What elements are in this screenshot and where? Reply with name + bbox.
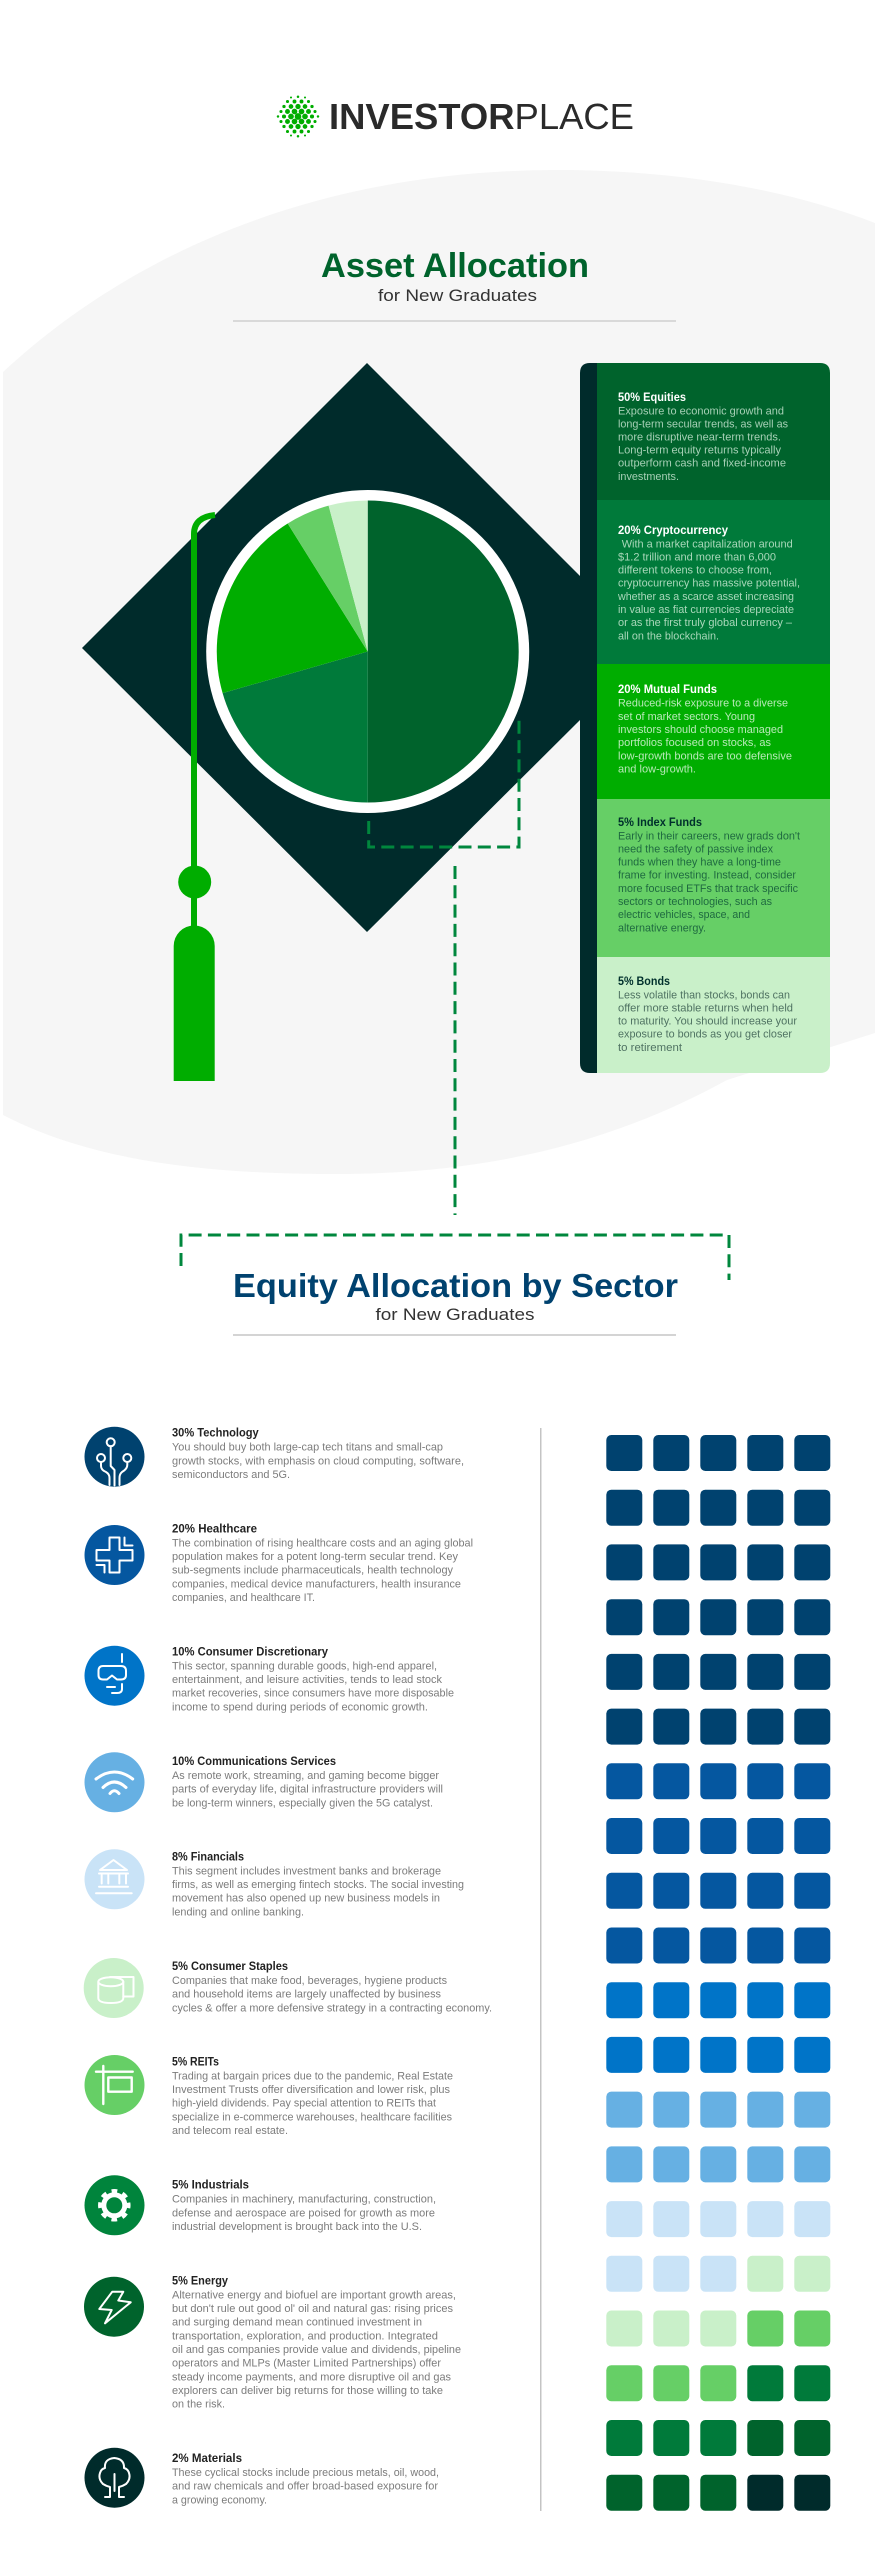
- text: Energy: Alternative energy and biofuel are important growth areas,: [172, 2289, 456, 2301]
- text: Healthcare: 20% Healthcare: [172, 1522, 258, 1535]
- text: REITs: [172, 2056, 453, 2137]
- heading: Equity Allocation by Sector: Equity Allocation by Sector: [233, 1267, 678, 1304]
- text: Financials: [172, 1851, 464, 1918]
- pie chart: asset allocation: [206, 490, 529, 813]
- text: Industrials: industrial development is brought back into the U.S.: [172, 2221, 422, 2233]
- panel section: 50% Equities: outperform cash and fixed-income: [618, 458, 786, 470]
- arrow: dashed bracket under pie: [369, 716, 519, 847]
- text: Consumer Staples: Companies that make food, beverages, hygiene products: [172, 1975, 447, 1987]
- text: Financials: firms, as well as emerging fintech stocks. The social investing: [172, 1879, 464, 1891]
- icon: snorkel mask: [84, 1646, 144, 1706]
- text: Healthcare: population makes for a potent long-term secular trend. Key: [172, 1551, 458, 1563]
- icon: circuit: [84, 1427, 144, 1487]
- waffle: Communications Services 10%: [606, 2092, 830, 2182]
- chart: waffle of sector allocation: [606, 1435, 830, 2511]
- text: Consumer Discretionary: entertainment, and leisure activities, tends to lead stock: [172, 1674, 442, 1686]
- panel section: 20% Cryptocurrency: cryptocurrency has massive potential,: [618, 578, 800, 590]
- waffle: REITs 5%: [606, 2310, 830, 2401]
- logo: InvestorPlace: [277, 96, 634, 137]
- text: Consumer Staples: 5% Consumer Staples: [172, 1960, 288, 1973]
- panel section: 50% Equities: investments.: [618, 471, 679, 483]
- panel section: 20% Mutual Funds: low-growth bonds are too defensive: [618, 750, 792, 762]
- icon: dotted globe: [277, 96, 319, 137]
- icon: property sign: [84, 2055, 144, 2115]
- panel section: 5% Bonds: exposure to bonds as you get closer: [618, 1029, 792, 1041]
- panel section: 5% Bonds: offer more stable returns when held: [618, 1002, 793, 1014]
- panel section: 20% Mutual Funds: portfolios focused on stocks, as: [618, 737, 771, 749]
- panel section: 5% Index Funds: [597, 799, 830, 957]
- text: REITs: Trading at bargain prices due to the pandemic, Real Estate: [172, 2070, 453, 2082]
- heading: Equity Allocation by Sector: for New Graduates: [376, 1305, 534, 1324]
- panel section: 20% Cryptocurrency: in value as fiat currencies depreciate: [618, 604, 794, 616]
- sector: REITs: [84, 2055, 453, 2137]
- text: Industrials: defense and aerospace are poised for growth as more: [172, 2207, 435, 2219]
- background: gray curved band: [3, 170, 875, 1174]
- text: Consumer Staples: [172, 1960, 492, 2014]
- text: Financials: This segment includes investment banks and brokerage: [172, 1865, 441, 1877]
- panel section: 5% Index Funds: 5% Index Funds: [618, 816, 702, 829]
- sector: Healthcare: [84, 1522, 473, 1604]
- waffle: Materials 2%: [747, 2475, 830, 2511]
- panel section: 5% Bonds: 5% Bonds: [618, 975, 670, 988]
- sector: Consumer Staples: [84, 1958, 492, 2018]
- text: Communications Services: As remote work, streaming, and gaming become bigger: [172, 1770, 439, 1782]
- panel section: 50% Equities: more disruptive near-term trends.: [618, 432, 781, 444]
- text: Consumer Discretionary: [172, 1646, 454, 1713]
- panel section: 5% Bonds: [597, 957, 830, 1073]
- text: Technology: 30% Technology: [172, 1427, 259, 1440]
- text: Financials: 8% Financials: [172, 1851, 244, 1864]
- text: Consumer Discretionary: income to spend during periods of economic growth.: [172, 1701, 428, 1713]
- waffle: Healthcare 20%: [606, 1763, 830, 1964]
- text: Materials: a growing economy.: [172, 2494, 267, 2506]
- text: Materials: These cyclical stocks include precious metals, oil, wood,: [172, 2467, 439, 2479]
- text: Communications Services: 10% Communications Services: [172, 1755, 336, 1768]
- tassel: [174, 515, 215, 1081]
- panel section: 5% Bonds: to retirement: [618, 1042, 683, 1054]
- text: Energy: transportation, exploration, and production. Integrated: [172, 2330, 438, 2342]
- text: Materials: [172, 2452, 439, 2506]
- text: Consumer Discretionary: 10% Consumer Discretionary: [172, 1646, 329, 1659]
- text: Healthcare: companies, and healthcare IT.: [172, 1592, 315, 1604]
- text: Consumer Staples: and household items are largely unaffected by business: [172, 1989, 441, 2001]
- text: Energy: steady income payments, and more disruptive oil and gas: [172, 2371, 451, 2383]
- text: Consumer Staples: cycles & offer a more defensive strategy in a contracting economy.: [172, 2002, 492, 2014]
- panel section: 5% Index Funds: electric vehicles, space, and: [618, 909, 750, 921]
- sector: Consumer Discretionary: [84, 1646, 454, 1713]
- panel section: 5% Index Funds: Early in their careers, new grads don't: [618, 830, 801, 842]
- text: Energy: operators and MLPs (Master Limited Partnerships) offer: [172, 2358, 441, 2370]
- text: Healthcare: sub-segments include pharmaceuticals, health technology: [172, 1565, 453, 1577]
- text: REITs: Investment Trusts offer diversification and lower risk, plus: [172, 2084, 450, 2096]
- panel section: 50% Equities: [597, 363, 830, 500]
- sector: Energy: [84, 2274, 461, 2411]
- icon: bank: [84, 1849, 144, 1909]
- text: Energy: but don't rule out good ol' oil and natural gas: rising prices: [172, 2303, 453, 2315]
- panel section: 5% Bonds: to maturity. You should increase your: [618, 1016, 797, 1028]
- text: Consumer Discretionary: market recoveries, since consumers have more disposable: [172, 1688, 454, 1700]
- text: Industrials: [172, 2179, 436, 2233]
- text: Industrials: 5% Industrials: [172, 2179, 249, 2192]
- text: Technology: You should buy both large-cap tech titans and small-cap: [172, 1442, 443, 1454]
- heading: Equity Allocation by Sector: [233, 1267, 678, 1336]
- sector: Materials: [84, 2448, 439, 2508]
- text: Materials: and raw chemicals and offer broad-based exposure for: [172, 2481, 438, 2493]
- text: REITs: 5% REITs: [172, 2056, 219, 2069]
- panel section: 20% Cryptocurrency: whether as a scarce asset increasing: [617, 591, 794, 603]
- icon: medical cross: [84, 1525, 144, 1585]
- panel section: 50% Equities: Exposure to economic growth and: [618, 405, 784, 417]
- panel section: 5% Bonds: Less volatile than stocks, bonds can: [618, 989, 790, 1001]
- icon: lightning bolt: [84, 2277, 144, 2337]
- icon: tree: [84, 2448, 144, 2508]
- text: Healthcare: The combination of rising healthcare costs and an aging global: [172, 1537, 473, 1549]
- panel section: 20% Mutual Funds: investors should choose managed: [618, 724, 783, 736]
- text: Materials: 2% Materials: [172, 2452, 242, 2465]
- text: REITs: specialize in e-commerce warehouses, healthcare facilities: [172, 2111, 452, 2123]
- text: REITs: high-yield dividends. Pay special attention to REITs that: [172, 2098, 437, 2110]
- text: Financials: lending and online banking.: [172, 1906, 304, 1918]
- text: Energy: explorers can deliver big returns for those willing to take: [172, 2385, 443, 2397]
- panel section: 5% Index Funds: need the safety of passive index: [618, 843, 773, 855]
- wordmark: INVESTORPLACE: [329, 96, 634, 137]
- panel section: 20% Cryptocurrency: 20% Cryptocurrency: [618, 524, 729, 537]
- sector: Communications Services: [84, 1752, 443, 1812]
- waffle: Consumer Discretionary 10%: [606, 1982, 830, 2073]
- text: Energy: oil and gas companies provide value and dividends, pipeline: [172, 2344, 461, 2356]
- text: Energy: and surging demand mean continued investment in: [172, 2317, 422, 2329]
- heading: Asset Allocation: Asset Allocation: [321, 247, 589, 285]
- panel section: 20% Cryptocurrency: or as the first truly global currency –: [618, 617, 793, 629]
- panel section: 20% Cryptocurrency: $1.2 trillion and more than 6,000: [618, 551, 776, 563]
- arrow: dashed bracket above equity title: [181, 1235, 729, 1280]
- text: Technology: semiconductors and 5G.: [172, 1469, 290, 1481]
- waffle: Energy 5%: [606, 2420, 830, 2511]
- heading: Asset Allocation: for New Graduates: [378, 286, 537, 305]
- text: Energy: 5% Energy: [172, 2274, 229, 2287]
- panel section: 50% Equities: long-term secular trends, as well as: [618, 418, 788, 430]
- icon: paper roll: [84, 1958, 144, 2018]
- panel section: 20% Cryptocurrency: different tokens to choose from,: [618, 565, 772, 577]
- panel section: 5% Index Funds: funds when they have a long-time: [618, 857, 781, 869]
- panel section: 50% Equities: 50% Equities: [618, 391, 686, 404]
- text: Healthcare: [172, 1522, 473, 1604]
- panel section: 20% Mutual Funds: and low-growth.: [618, 763, 696, 775]
- text: Financials: movement has also opened up new business models in: [172, 1893, 440, 1905]
- panel spine: [580, 363, 600, 1073]
- panel section: 20% Mutual Funds: [597, 664, 830, 799]
- waffle: Consumer Staples 5%: [606, 2256, 830, 2346]
- text: REITs: and telecom real estate.: [172, 2125, 288, 2137]
- text: Communications Services: be long-term winners, especially given the 5G catalyst.: [172, 1797, 433, 1809]
- text: Healthcare: companies, medical device manufacturers, health insurance: [172, 1578, 461, 1590]
- waffle: Technology 30%: [606, 1435, 830, 1745]
- panel section: 5% Index Funds: more focused ETFs that track specific: [618, 883, 798, 895]
- text: Technology: [172, 1427, 464, 1481]
- panel: asset classes: [580, 363, 830, 1073]
- heading: Asset Allocation: [233, 247, 676, 322]
- text: Communications Services: parts of everyday life, digital infrastructure providers will: [172, 1784, 443, 1796]
- text: Consumer Discretionary: This sector, spanning durable goods, high-end apparel,: [172, 1660, 437, 1672]
- sector: Technology: [84, 1427, 464, 1487]
- panel section: 20% Cryptocurrency: [597, 500, 830, 664]
- waffle: Industrials 5%: [606, 2365, 830, 2456]
- text: Energy: [172, 2274, 461, 2411]
- panel section: 50% Equities: Long-term equity returns typically: [618, 445, 781, 457]
- text: Industrials: Companies in machinery, manufacturing, construction,: [172, 2194, 436, 2206]
- panel section: 20% Mutual Funds: Reduced-risk exposure to a diverse: [618, 698, 788, 710]
- icon: gear: [84, 2175, 144, 2235]
- graduation cap with pie chart: [82, 363, 580, 1081]
- panel section: 5% Index Funds: frame for investing. Instead, consider: [618, 870, 796, 882]
- sector: Financials: [84, 1849, 464, 1918]
- text: Technology: growth stocks, with emphasis on cloud computing, software,: [172, 1455, 464, 1467]
- panel section: 20% Mutual Funds: set of market sectors. Young: [618, 711, 755, 723]
- panel section: 20% Cryptocurrency: all on the blockchain.: [618, 630, 719, 642]
- sector: Industrials: [84, 2175, 436, 2235]
- panel section: 20% Mutual Funds: 20% Mutual Funds: [618, 683, 717, 696]
- text: Communications Services: [172, 1755, 443, 1809]
- cap board diamond: [82, 363, 580, 932]
- panel section: 20% Cryptocurrency: With a market capitalization around: [622, 538, 793, 550]
- waffle: Financials 8%: [606, 2201, 830, 2292]
- text: Energy: on the risk.: [172, 2399, 225, 2411]
- panel section: 5% Index Funds: sectors or technologies, such as: [618, 896, 772, 908]
- arrow: dashed connector to equity section: [454, 866, 456, 1215]
- panel section: 5% Index Funds: alternative energy.: [618, 922, 706, 934]
- icon: wifi: [84, 1752, 144, 1812]
